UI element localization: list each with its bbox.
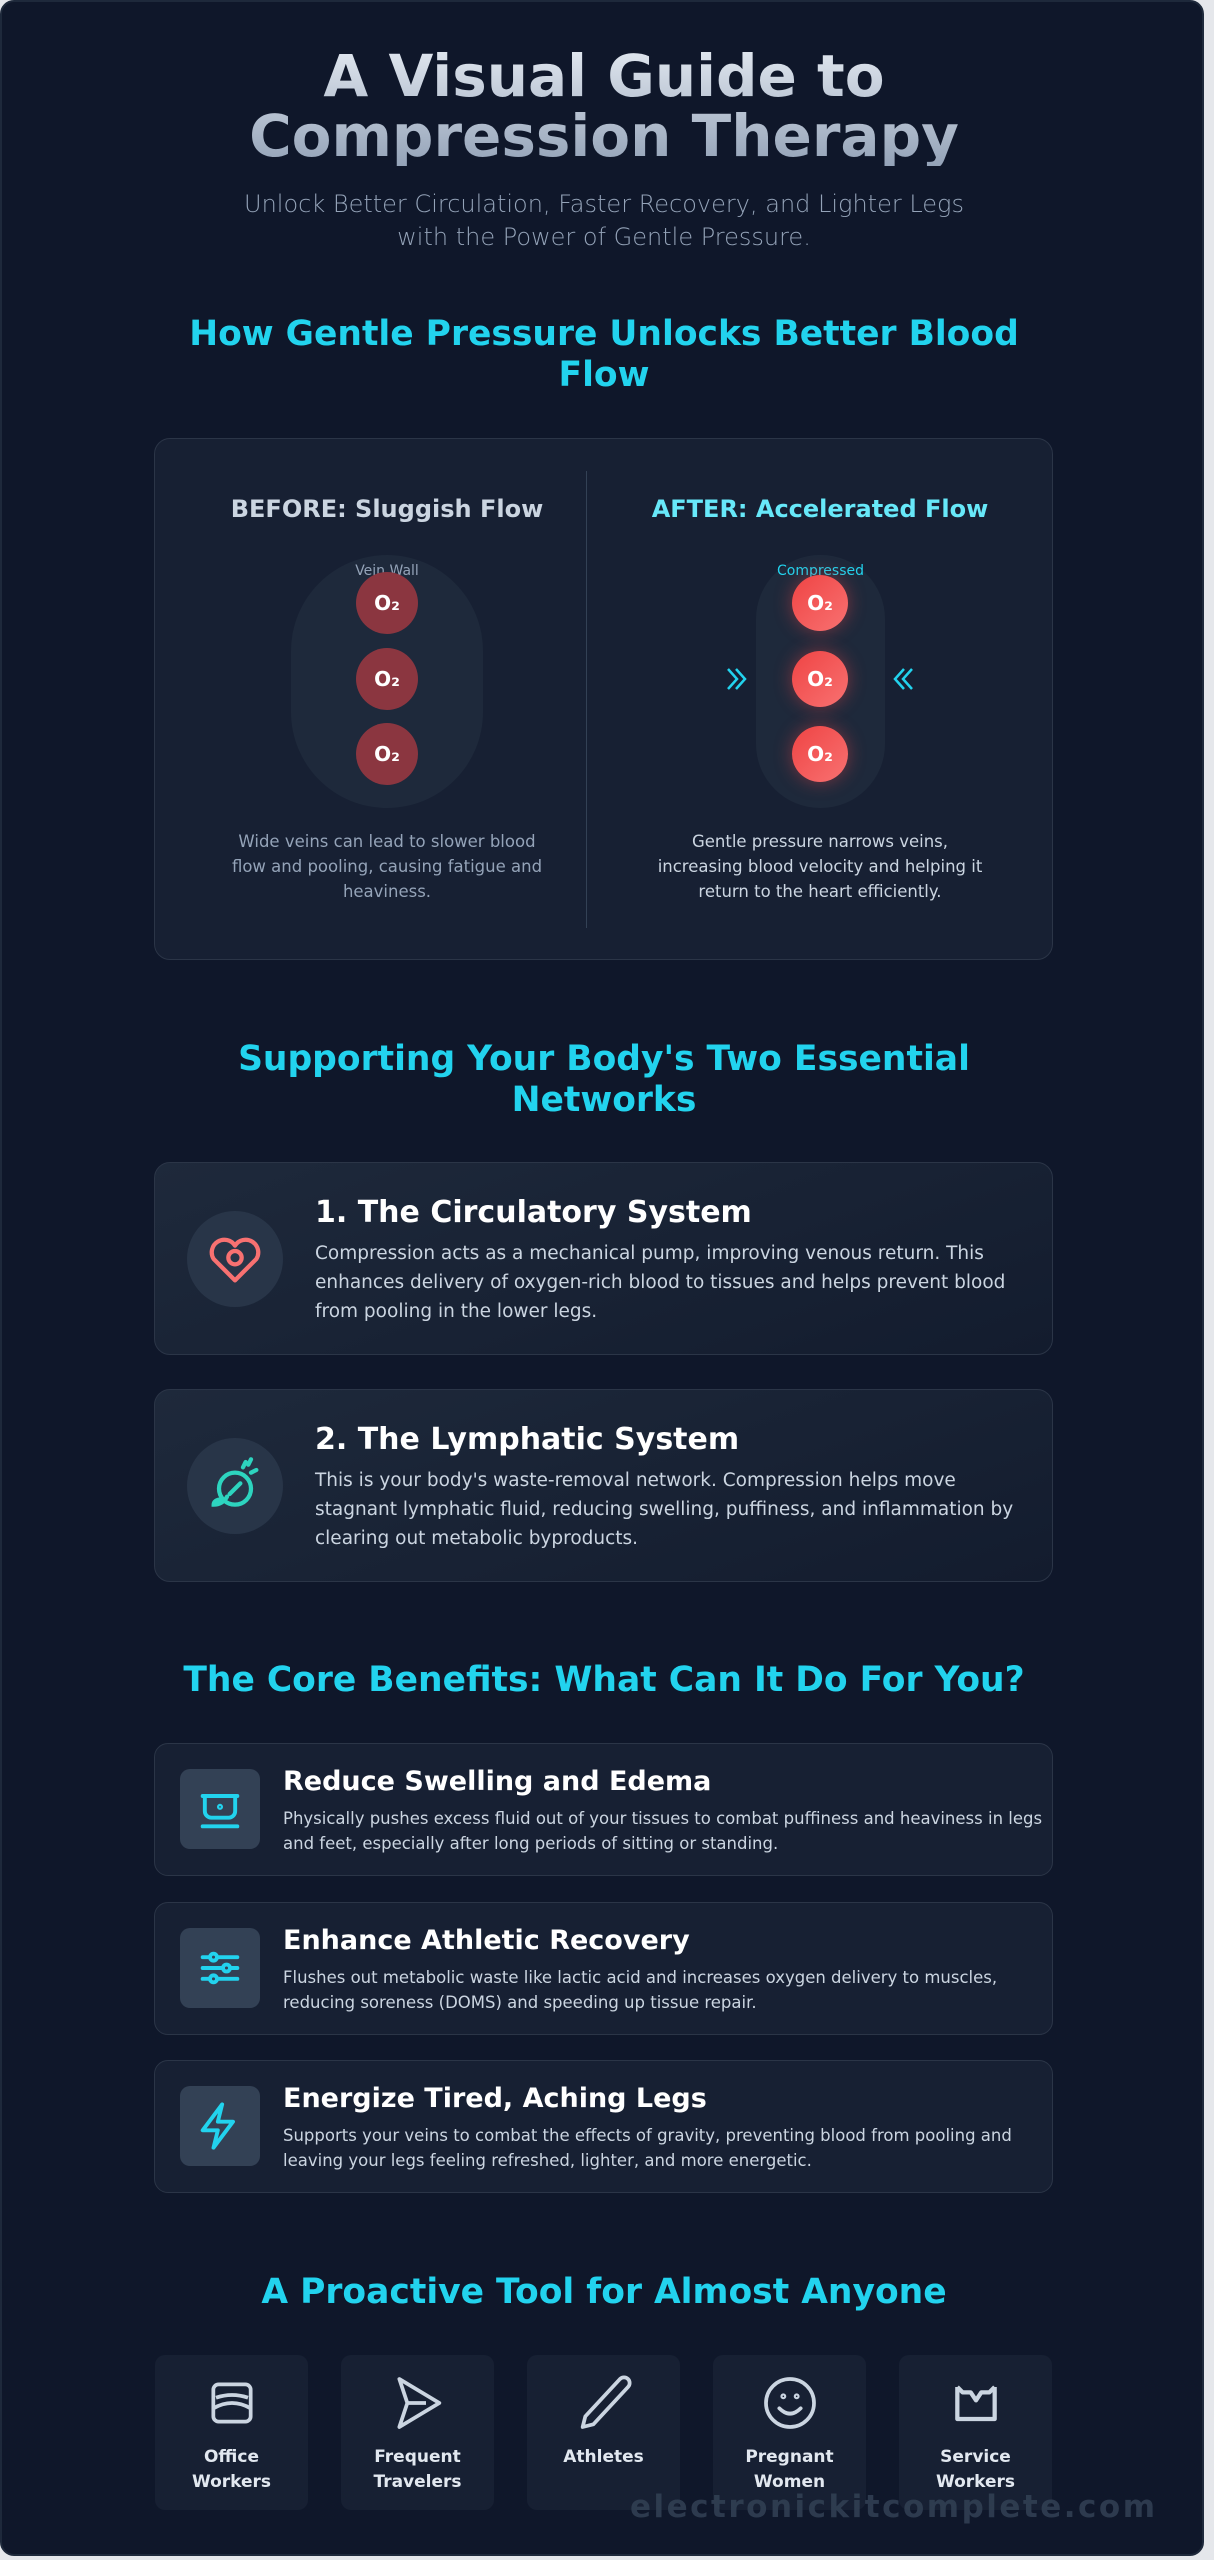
heading: audiences: A Proactive Tool for Almost Anyone	[261, 2272, 947, 2312]
after vein	[756, 555, 885, 808]
card: circulatory	[154, 1162, 1053, 1355]
before vein	[291, 555, 483, 808]
after vein: O₂	[807, 591, 833, 615]
after description	[658, 832, 982, 901]
subtitle: with the Power of Gentle Pressure.	[397, 223, 811, 251]
after vein: Compressed	[777, 563, 864, 579]
before description: Wide veins can lead to slower blood flow and pooling, causing fatigue and heaviness.	[232, 832, 542, 901]
after vein: O₂	[807, 667, 833, 691]
audience: service workers: Service	[940, 2447, 1011, 2467]
benefit: swelling: Physically pushes excess fluid out of your tissues to combat puffiness and heaviness in legs and feet, especially after long periods of sitting or standing.	[283, 1809, 1042, 1853]
heading: two networks: Networks	[512, 1080, 696, 1120]
benefit: recovery: Flushes out metabolic waste like lactic acid and increases oxygen delivery to muscles, reducing soreness (DOMS) and speeding up tissue repair.	[283, 1968, 997, 2012]
title	[102, 46, 1106, 166]
arrows: compression chevrons	[727, 668, 913, 690]
heading: two networks: Supporting Your Body's Two Essential	[238, 1039, 970, 1079]
audience: pregnant women: Pregnant	[745, 2447, 834, 2467]
icon: heart	[187, 1211, 283, 1307]
audience: office workers	[155, 2355, 308, 2510]
benefit: energize	[154, 2060, 1053, 2193]
card: circulatory: Compression acts as a mechanical pump, improving venous return. This enhances delivery of oxygen-rich blood to tissues and helps prevent blood from pooling in the lower legs.	[315, 1243, 1005, 1322]
after description: Gentle pressure narrows veins,	[692, 832, 948, 851]
audience: athletes	[527, 2355, 680, 2510]
card: lymphatic: 2. The Lymphatic System	[315, 1422, 739, 1457]
before vein: O₂	[374, 667, 400, 691]
heading: how pressure works: Flow	[559, 355, 649, 395]
before vein: O₂	[374, 742, 400, 766]
before vein: O₂	[374, 591, 400, 615]
audience: office workers: Workers	[192, 2472, 271, 2492]
watermark: electronickitcomplete.com	[630, 2489, 1158, 2525]
audience: service workers	[899, 2355, 1052, 2510]
icon: bolt	[180, 2086, 260, 2166]
audience: travelers	[341, 2355, 494, 2510]
card: lymphatic	[154, 1389, 1053, 1582]
benefit: swelling: Reduce Swelling and Edema	[283, 1766, 711, 1797]
after heading: AFTER: Accelerated Flow	[652, 495, 988, 523]
heading: core benefits: The Core Benefits: What Can It Do For You?	[183, 1660, 1025, 1700]
icon: lymph	[187, 1438, 283, 1534]
benefit: recovery	[154, 1902, 1053, 2035]
heading: how pressure works: How Gentle Pressure Unlocks Better Blood	[189, 314, 1019, 354]
after description: increasing blood velocity and helping it return to the heart efficiently.	[658, 857, 982, 901]
benefit: swelling	[154, 1743, 1053, 1876]
icon: basin	[180, 1769, 260, 1849]
audience: pregnant women: Women	[754, 2472, 825, 2492]
subtitle	[244, 190, 964, 251]
audience: service workers: Workers	[936, 2472, 1015, 2492]
title: Compression Therapy	[249, 102, 959, 170]
benefit: energize: Energize Tired, Aching Legs	[283, 2083, 707, 2114]
audience: athletes: Athletes	[563, 2447, 644, 2467]
benefit: recovery: Enhance Athletic Recovery	[283, 1925, 690, 1956]
audience: office workers: Office	[204, 2447, 259, 2467]
benefit: energize: Supports your veins to combat the effects of gravity, preventing blood from pooling and leaving your legs feeling refreshed, lighter, and more energetic.	[283, 2126, 1012, 2170]
subtitle: Unlock Better Circulation, Faster Recovery, and Lighter Legs	[244, 190, 964, 218]
audience: travelers: Frequent	[374, 2447, 461, 2467]
before vein: Vein Wall	[355, 563, 419, 579]
before heading: BEFORE: Sluggish Flow	[231, 495, 543, 523]
panel: before/after	[154, 438, 1053, 960]
icon: sliders	[180, 1928, 260, 2008]
audience: pregnant women	[713, 2355, 866, 2510]
card: lymphatic: This is your body's waste-removal network. Compression helps move stagnant lymphatic fluid, reducing swelling, puffiness, and inflammation by clearing out metabolic byproducts.	[315, 1470, 1013, 1549]
heading: how pressure works	[189, 314, 1019, 395]
card: circulatory: 1. The Circulatory System	[315, 1195, 752, 1230]
audience: travelers: Travelers	[373, 2472, 462, 2492]
title: A Visual Guide to	[323, 42, 885, 110]
heading: two networks	[238, 1039, 970, 1120]
after vein: O₂	[807, 742, 833, 766]
